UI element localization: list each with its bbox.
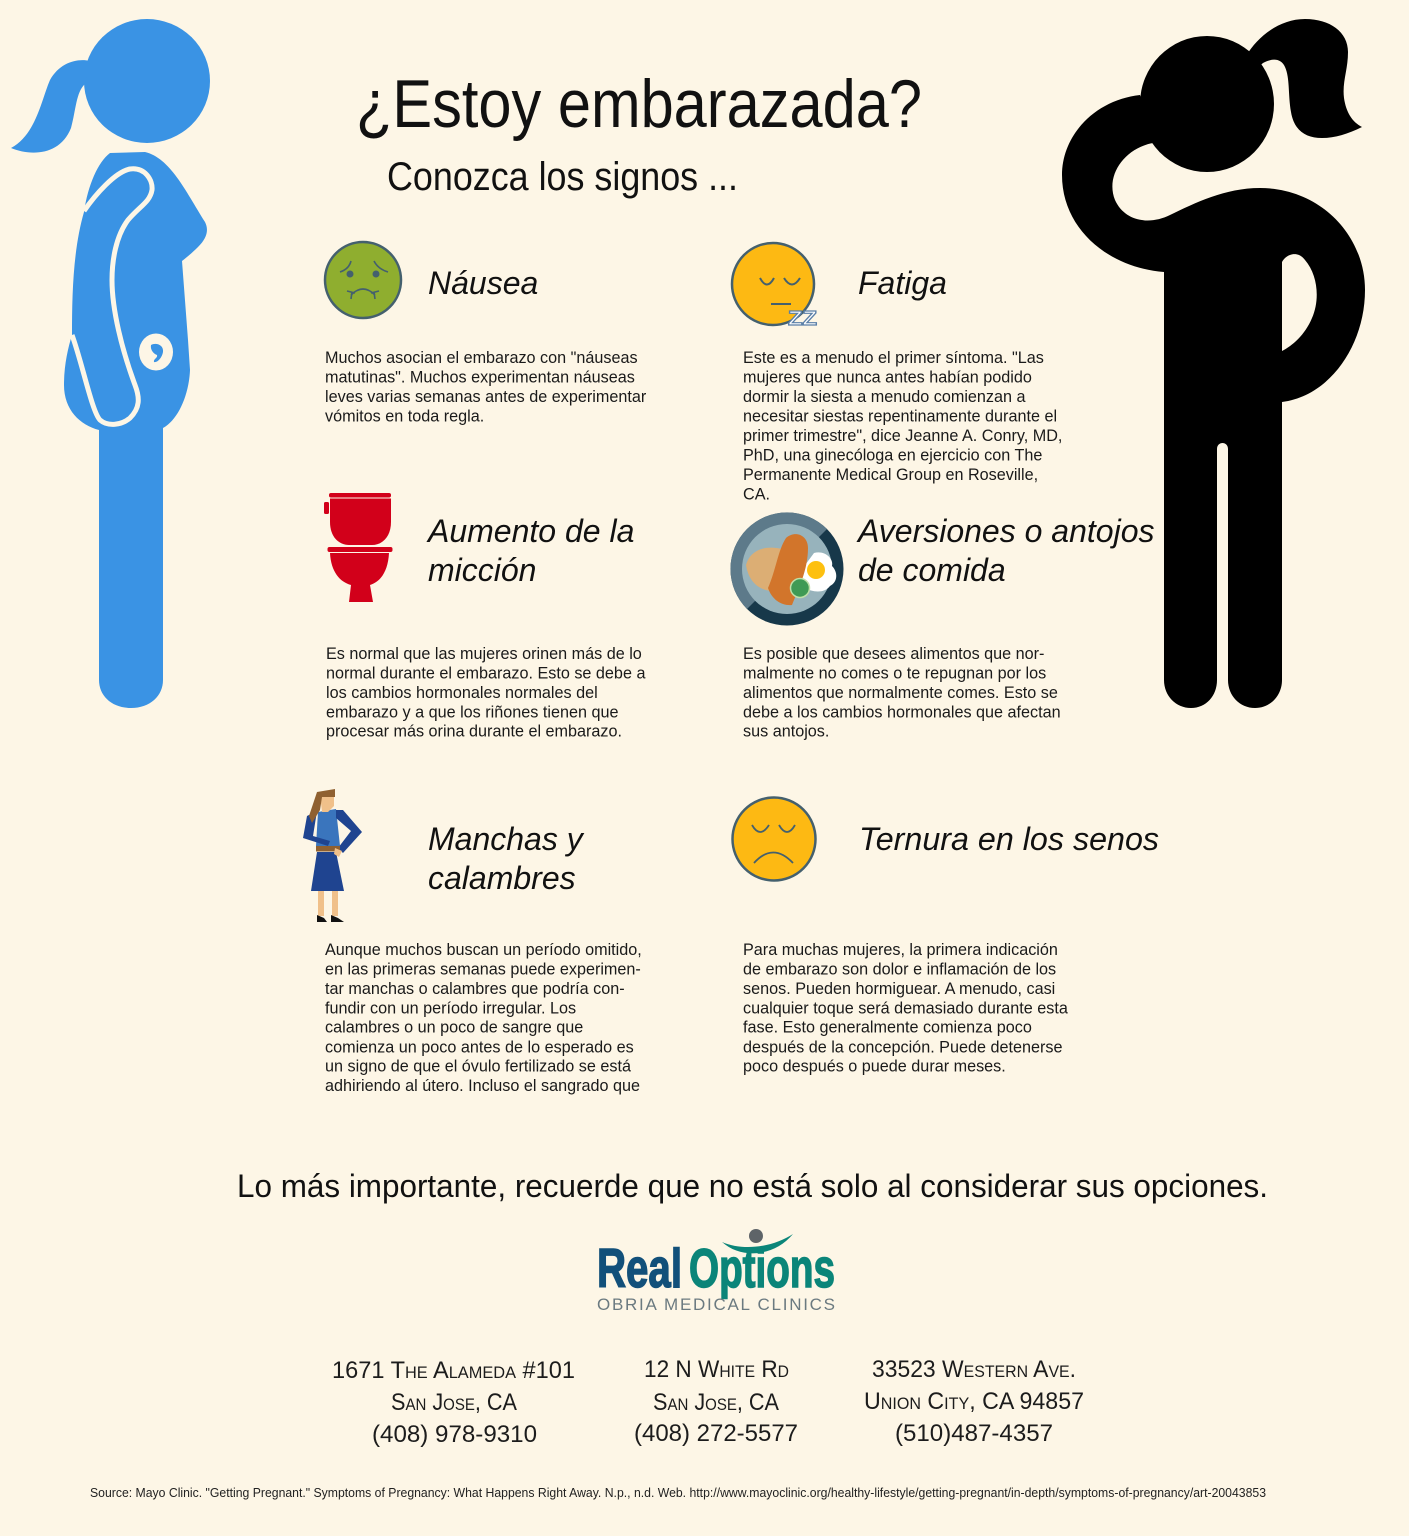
text block: cualquier toque será demasiado durante esta xyxy=(743,999,1068,1017)
icon: nausea face xyxy=(325,242,401,318)
heading: calambres xyxy=(428,860,576,896)
text block: fundir con un período irregular. Los xyxy=(325,999,576,1017)
heading: Fatiga xyxy=(858,265,947,301)
text block: después de la concepción. Puede detenerse xyxy=(743,1038,1062,1056)
text block: adhiriendo al útero. Incluso el sangrado que xyxy=(325,1077,640,1095)
text block: Es normal que las mujeres orinen más de lo xyxy=(326,645,642,663)
address: San Jose, White Rd xyxy=(634,1356,798,1447)
text block: de embarazo son dolor e inflamación de los xyxy=(743,960,1056,978)
address: San Jose, White Rd: (408) 272-5577 xyxy=(634,1420,798,1447)
text block: senos. Pueden hormiguear. A menudo, casi xyxy=(743,980,1055,998)
text block: Para muchas mujeres, la primera indicación xyxy=(743,941,1058,959)
panel: fatiga xyxy=(732,243,1067,504)
heading: Náusea xyxy=(428,265,538,301)
address: San Jose, White Rd: 12 N White Rd xyxy=(644,1356,789,1383)
address: Union City xyxy=(864,1356,1084,1447)
heading: Ternura en los senos xyxy=(859,821,1159,857)
text block: CA. xyxy=(743,486,770,504)
text block: comienza un poco antes de lo esperado es xyxy=(325,1038,634,1056)
text block: Permanente Medical Group en Roseville, xyxy=(743,466,1038,484)
text block: en las primeras semanas puede experimen- xyxy=(325,960,641,978)
logo: RealOptions: Real xyxy=(597,1237,682,1299)
panel: aumento de la micción xyxy=(324,493,650,741)
logo: RealOptions: OBRIA MEDICAL CLINICS xyxy=(597,1295,835,1314)
text block: los cambios hormonales normales del xyxy=(326,684,598,702)
heading: micción xyxy=(428,552,536,588)
panel: manchas y calambres xyxy=(303,789,646,1095)
address: San Jose, The Alameda: San Jose, CA xyxy=(391,1389,518,1416)
heading: Aumento de la xyxy=(426,513,634,549)
logo: RealOptions: Options xyxy=(689,1237,835,1299)
text block: poco después o puede durar meses. xyxy=(743,1058,1006,1076)
text block: mujeres que nunca antes habían podido xyxy=(743,368,1032,386)
text block: un signo de que el óvulo fertilizado se está xyxy=(325,1058,631,1076)
panel: náusea xyxy=(325,242,651,426)
icon: sad face xyxy=(732,798,816,880)
text block: primer trimestre", dice Jeanne A. Conry, MD, xyxy=(743,427,1062,445)
text block: fase. Esto generalmente comienza poco xyxy=(743,1019,1032,1037)
address: San Jose, White Rd: San Jose, CA xyxy=(653,1389,780,1416)
panel: ternura en los senos xyxy=(732,798,1159,1076)
figure: pregnant woman in blue xyxy=(11,19,210,708)
figure: black woman silhouette xyxy=(1062,19,1365,708)
text block: alimentos que normalmente comes. Esto se xyxy=(743,684,1058,702)
text block: necesitar siestas repentinamente durante el xyxy=(743,408,1057,426)
address: San Jose, The Alameda: 1671 The Alameda #101 xyxy=(332,1357,575,1384)
heading: Aversiones o antojos xyxy=(856,513,1154,549)
text block: malmente no comes o te repugnan por los xyxy=(743,664,1046,682)
text block: calambres o un poco de sangre que xyxy=(325,1019,583,1037)
text block: Es posible que desees alimentos que nor- xyxy=(743,645,1044,663)
address: Union City: 33523 Western Ave. xyxy=(872,1356,1076,1383)
icon: toilet xyxy=(324,493,392,602)
address: Union City: Union City, CA 94857 xyxy=(864,1388,1084,1415)
text block: Aunque muchos buscan un período omitido, xyxy=(325,941,642,959)
text block: tar manchas o calambres que podría con- xyxy=(325,980,625,998)
icon: sleepy face: ZZ xyxy=(788,308,817,330)
icon: woman holding abdomen xyxy=(303,789,362,922)
text block: normal durante el embarazo. Esto se debe a xyxy=(326,664,645,682)
closing message: Lo más importante, recuerde que no está solo al considerar sus opciones. xyxy=(237,1168,1268,1204)
text block: PhD, una ginecóloga en ejercicio con The xyxy=(743,446,1042,464)
address: San Jose, The Alameda: (408) 978-9310 xyxy=(372,1421,537,1448)
source note: Source: Mayo Clinic. "Getting Pregnant." Symptoms of Pregnancy: What Happens Right Away. N.p., n.d. Web. http://www.mayoclinic.org/healthy-lifestyle/getting-pregnant/in-depth/symptoms-of-pregnancy/art-20043853 xyxy=(90,1486,1266,1500)
text block: leves varias semanas antes de experimentar xyxy=(325,388,647,406)
text block: debe a los cambios hormonales que afectan xyxy=(743,703,1061,721)
title: ¿Estoy embarazada? xyxy=(356,66,922,142)
heading: Manchas y xyxy=(428,821,585,857)
text block: dormir la siesta a menudo comienzan a xyxy=(743,388,1026,406)
text block: Este es a menudo el primer síntoma. "Las xyxy=(743,349,1044,367)
heading: de comida xyxy=(858,552,1006,588)
address: Union City: (510)487-4357 xyxy=(895,1420,1053,1447)
subtitle: Conozca los signos ... xyxy=(387,155,738,199)
text block: Muchos asocian el embarazo con "náuseas xyxy=(325,349,638,367)
logo: RealOptions xyxy=(597,1229,835,1314)
text block: matutinas". Muchos experimentan náuseas xyxy=(325,368,635,386)
icon: plate of food xyxy=(730,512,844,626)
address: San Jose, The Alameda xyxy=(332,1357,575,1448)
text block: embarazo y a que los riñones tienen que xyxy=(326,703,618,721)
text block: sus antojos. xyxy=(743,723,829,741)
icon: sleepy face xyxy=(732,243,817,330)
panel: aversiones o antojos de comida xyxy=(730,512,1154,741)
text block: vómitos en toda regla. xyxy=(325,408,484,426)
text block: procesar más orina durante el embarazo. xyxy=(326,723,622,741)
